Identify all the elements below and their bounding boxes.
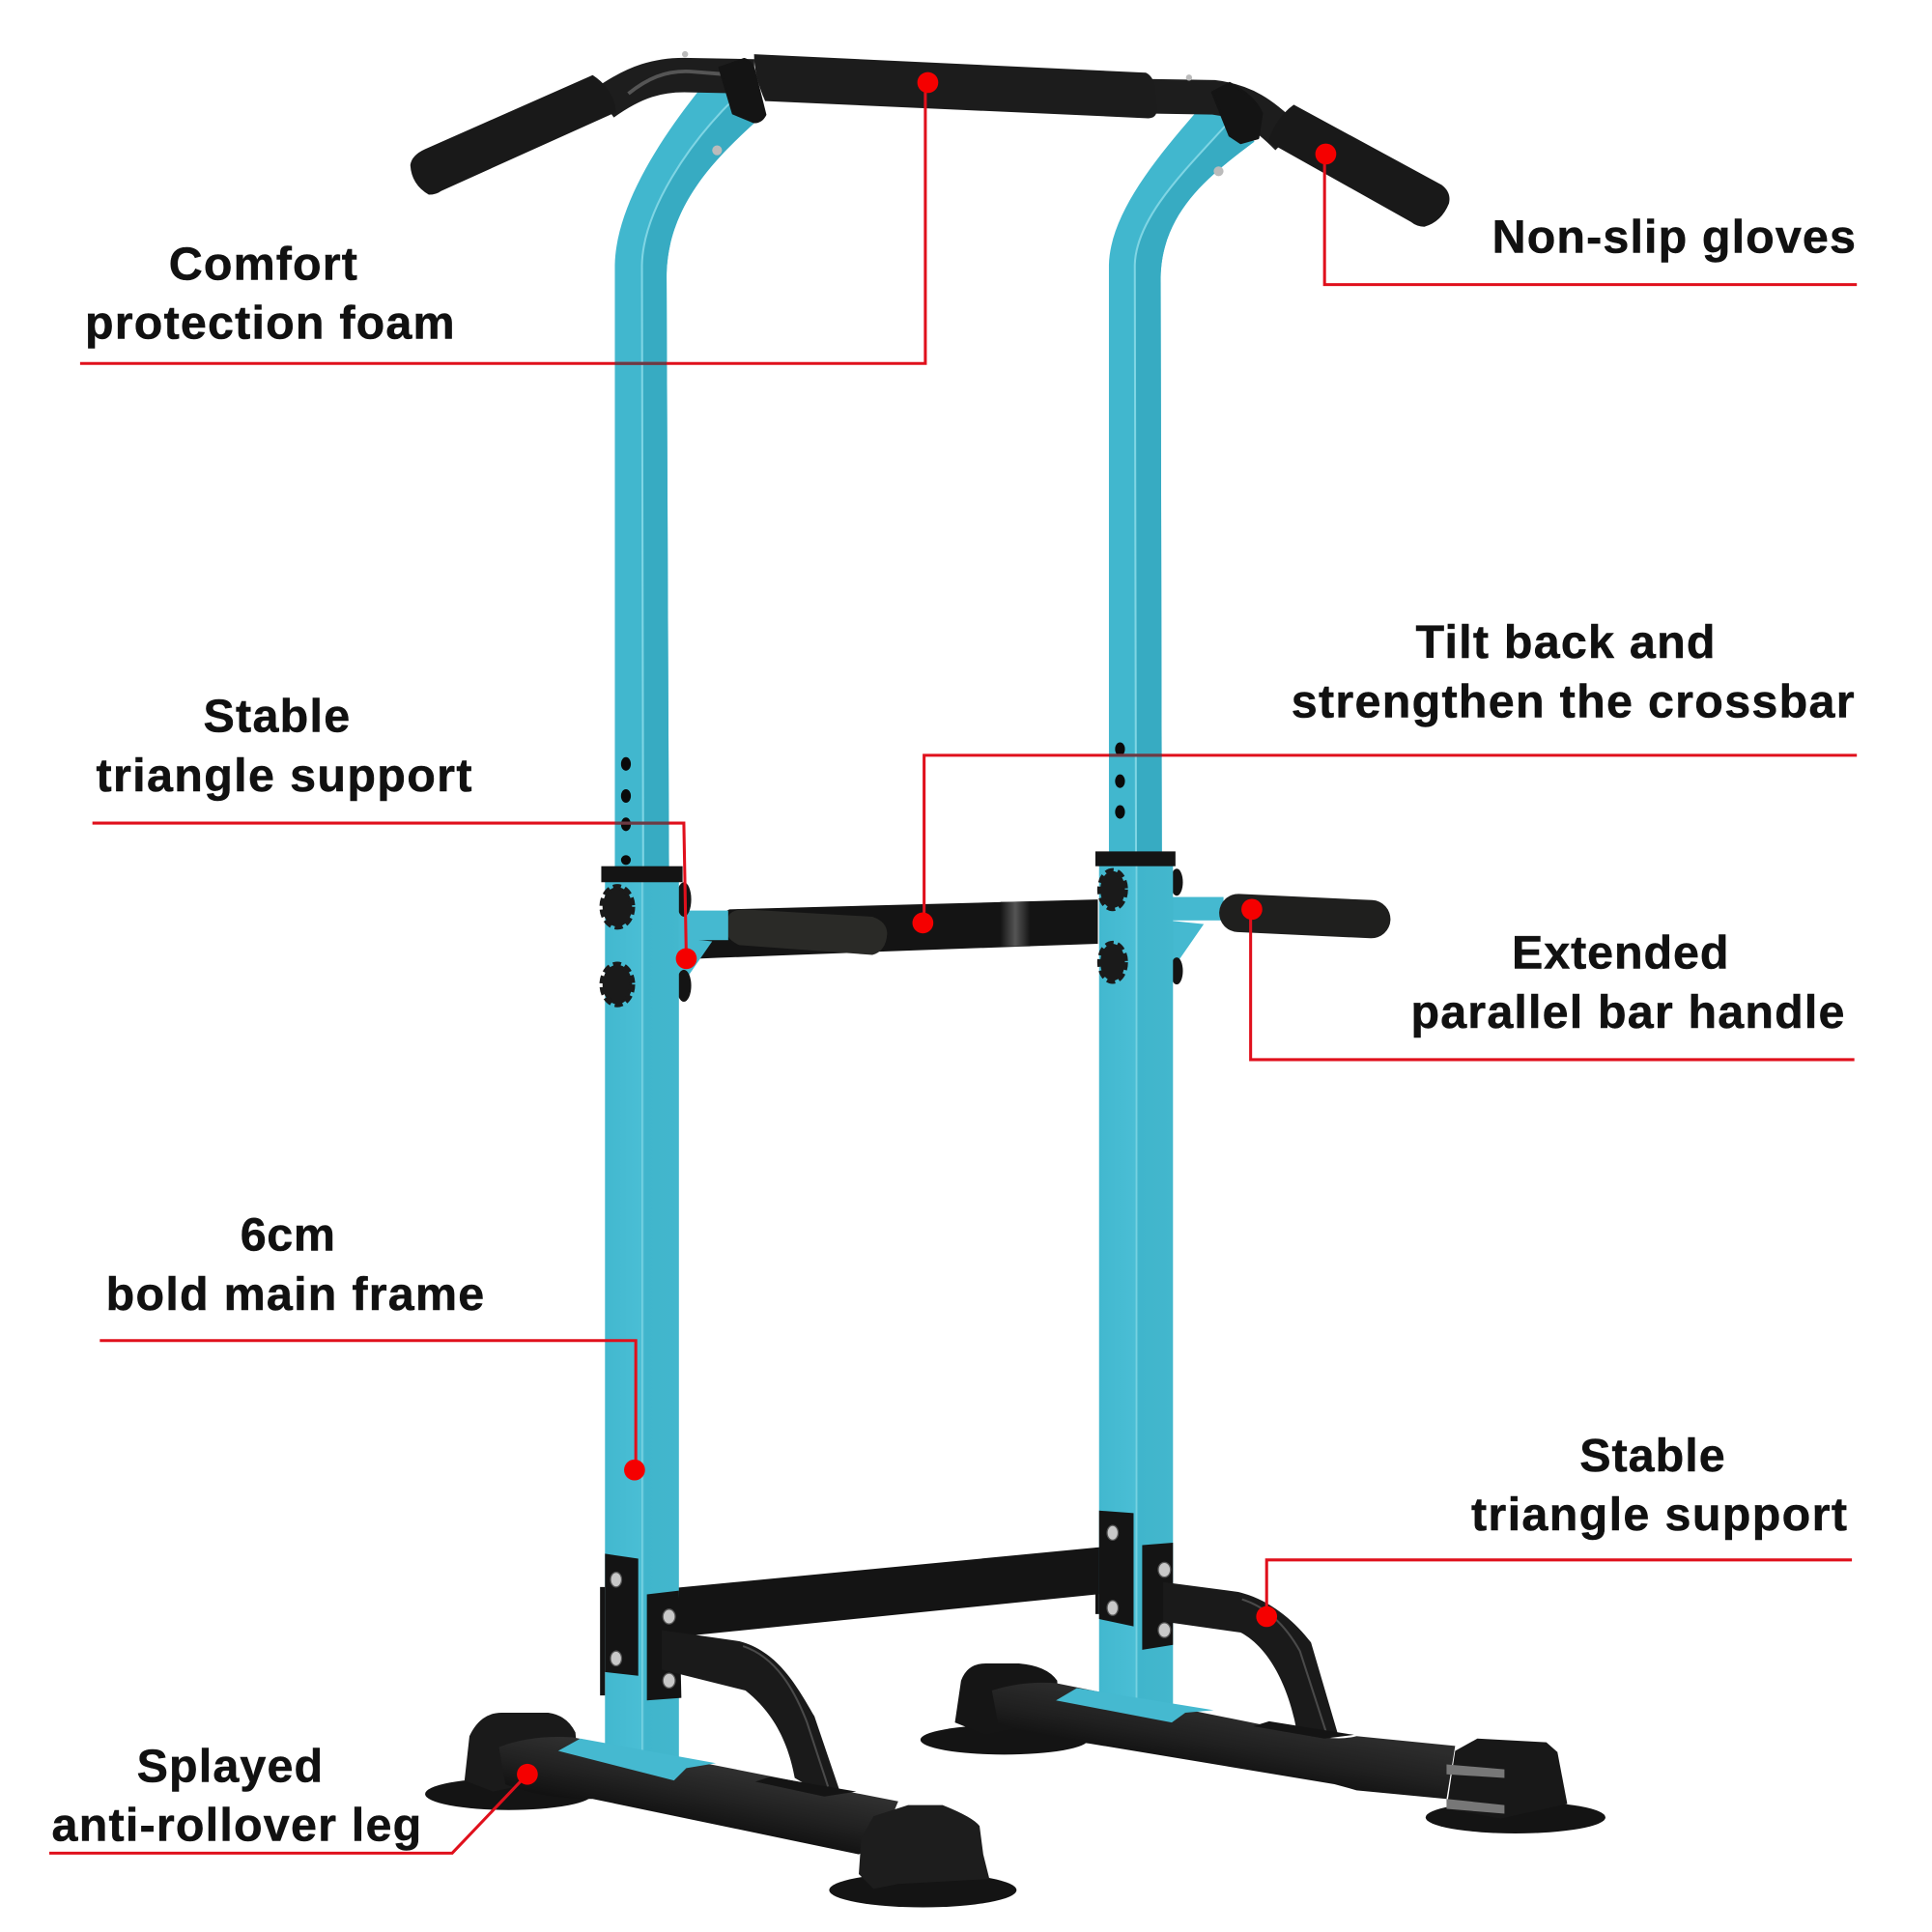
top bar bends [604,75,1288,138]
label text: Non-slip gloves [1492,211,1856,263]
right clamp plates [1095,1511,1173,1650]
left side arm and gusset [654,911,728,1006]
label text [85,239,455,350]
label text: Tilt back and [1416,616,1716,668]
right rear small plate [1253,1721,1354,1739]
left base bar [499,1737,898,1855]
product: power tower frame [411,51,1605,1907]
label text: anti-rollover leg [52,1800,421,1852]
clamp bolts [611,1525,1171,1688]
callout: non-slip gloves [1316,144,1857,285]
label text [1410,927,1844,1038]
label text: Comfort [169,239,357,291]
middle foam grip [724,909,887,955]
leader line [99,1341,636,1470]
left back foot cap [465,1713,579,1792]
small top bolts [682,51,1224,176]
leader line [1251,909,1855,1060]
right front foot disc [1426,1802,1605,1833]
front foot disc [829,1873,1016,1907]
label text: Extended [1512,927,1729,980]
right arch support [1163,1582,1338,1739]
back foot discs [425,1725,1088,1810]
adjustment knobs [603,871,1125,1005]
label text [106,1209,484,1321]
label text [96,691,472,802]
marker dot [1256,1606,1277,1627]
callout: splayed anti-rollover leg [49,1740,538,1853]
label text: bold main frame [106,1268,484,1321]
left front foot cap [859,1805,989,1889]
marker dot [676,949,696,969]
marker dot [517,1764,538,1785]
label text: protection foam [85,298,455,350]
right hand grip [1267,104,1450,227]
left arch support [662,1631,839,1797]
middle bar [698,899,1097,958]
marker dot [913,913,933,933]
callout: stable triangle support, left [93,691,696,969]
label text [1471,1430,1847,1541]
label text [1292,616,1855,727]
label text: Stable [1579,1430,1725,1482]
right handle [1238,913,1372,920]
right upper tube [1109,93,1254,863]
marker dot [918,72,938,93]
leader line [924,755,1857,923]
marker dot [1241,898,1263,920]
label text: Stable [203,691,350,743]
leader line [49,1775,527,1853]
marker dot [1316,144,1336,164]
middle bar highlight [1001,902,1030,947]
collars [601,851,1176,882]
callout: comfort protection foam [80,72,938,363]
top bracket plates [720,59,1262,143]
label text: parallel bar handle [1410,986,1844,1038]
left rear small plate [755,1776,856,1797]
leader line [1266,1560,1852,1616]
adjustment holes [621,742,1125,865]
left lower tube [605,868,679,1758]
leader line [1324,154,1857,285]
right teal base plate [1056,1688,1213,1722]
label text: strengthen the crossbar [1292,675,1855,727]
right lower tube [1099,856,1173,1709]
left hand grip [411,75,616,195]
right back foot cap [955,1663,1060,1735]
right base bar [992,1683,1455,1799]
left clamp plates [600,1553,681,1700]
knobs behind tubes [676,868,1182,1002]
leader line [80,82,925,363]
label text: 6cm [241,1209,335,1262]
right side arm and gusset [1148,897,1224,988]
callout: 6cm bold main frame [99,1209,645,1481]
callout: extended parallel bar handle [1241,898,1855,1060]
label text: Splayed [137,1740,323,1792]
label text: triangle support [1471,1489,1847,1541]
right front foot cap [1446,1739,1567,1819]
cap stripes [1446,1765,1504,1814]
label text [52,1740,421,1852]
leader line [93,823,686,958]
callout: stable triangle support, right [1256,1430,1852,1627]
top foam sleeve [754,54,1157,118]
left upper tube [614,71,754,875]
left teal base plate [558,1739,716,1780]
callout: tilt back crossbar [913,616,1857,933]
marker dot [624,1460,645,1481]
lower crossbar [659,1547,1109,1638]
label text: triangle support [96,750,472,802]
